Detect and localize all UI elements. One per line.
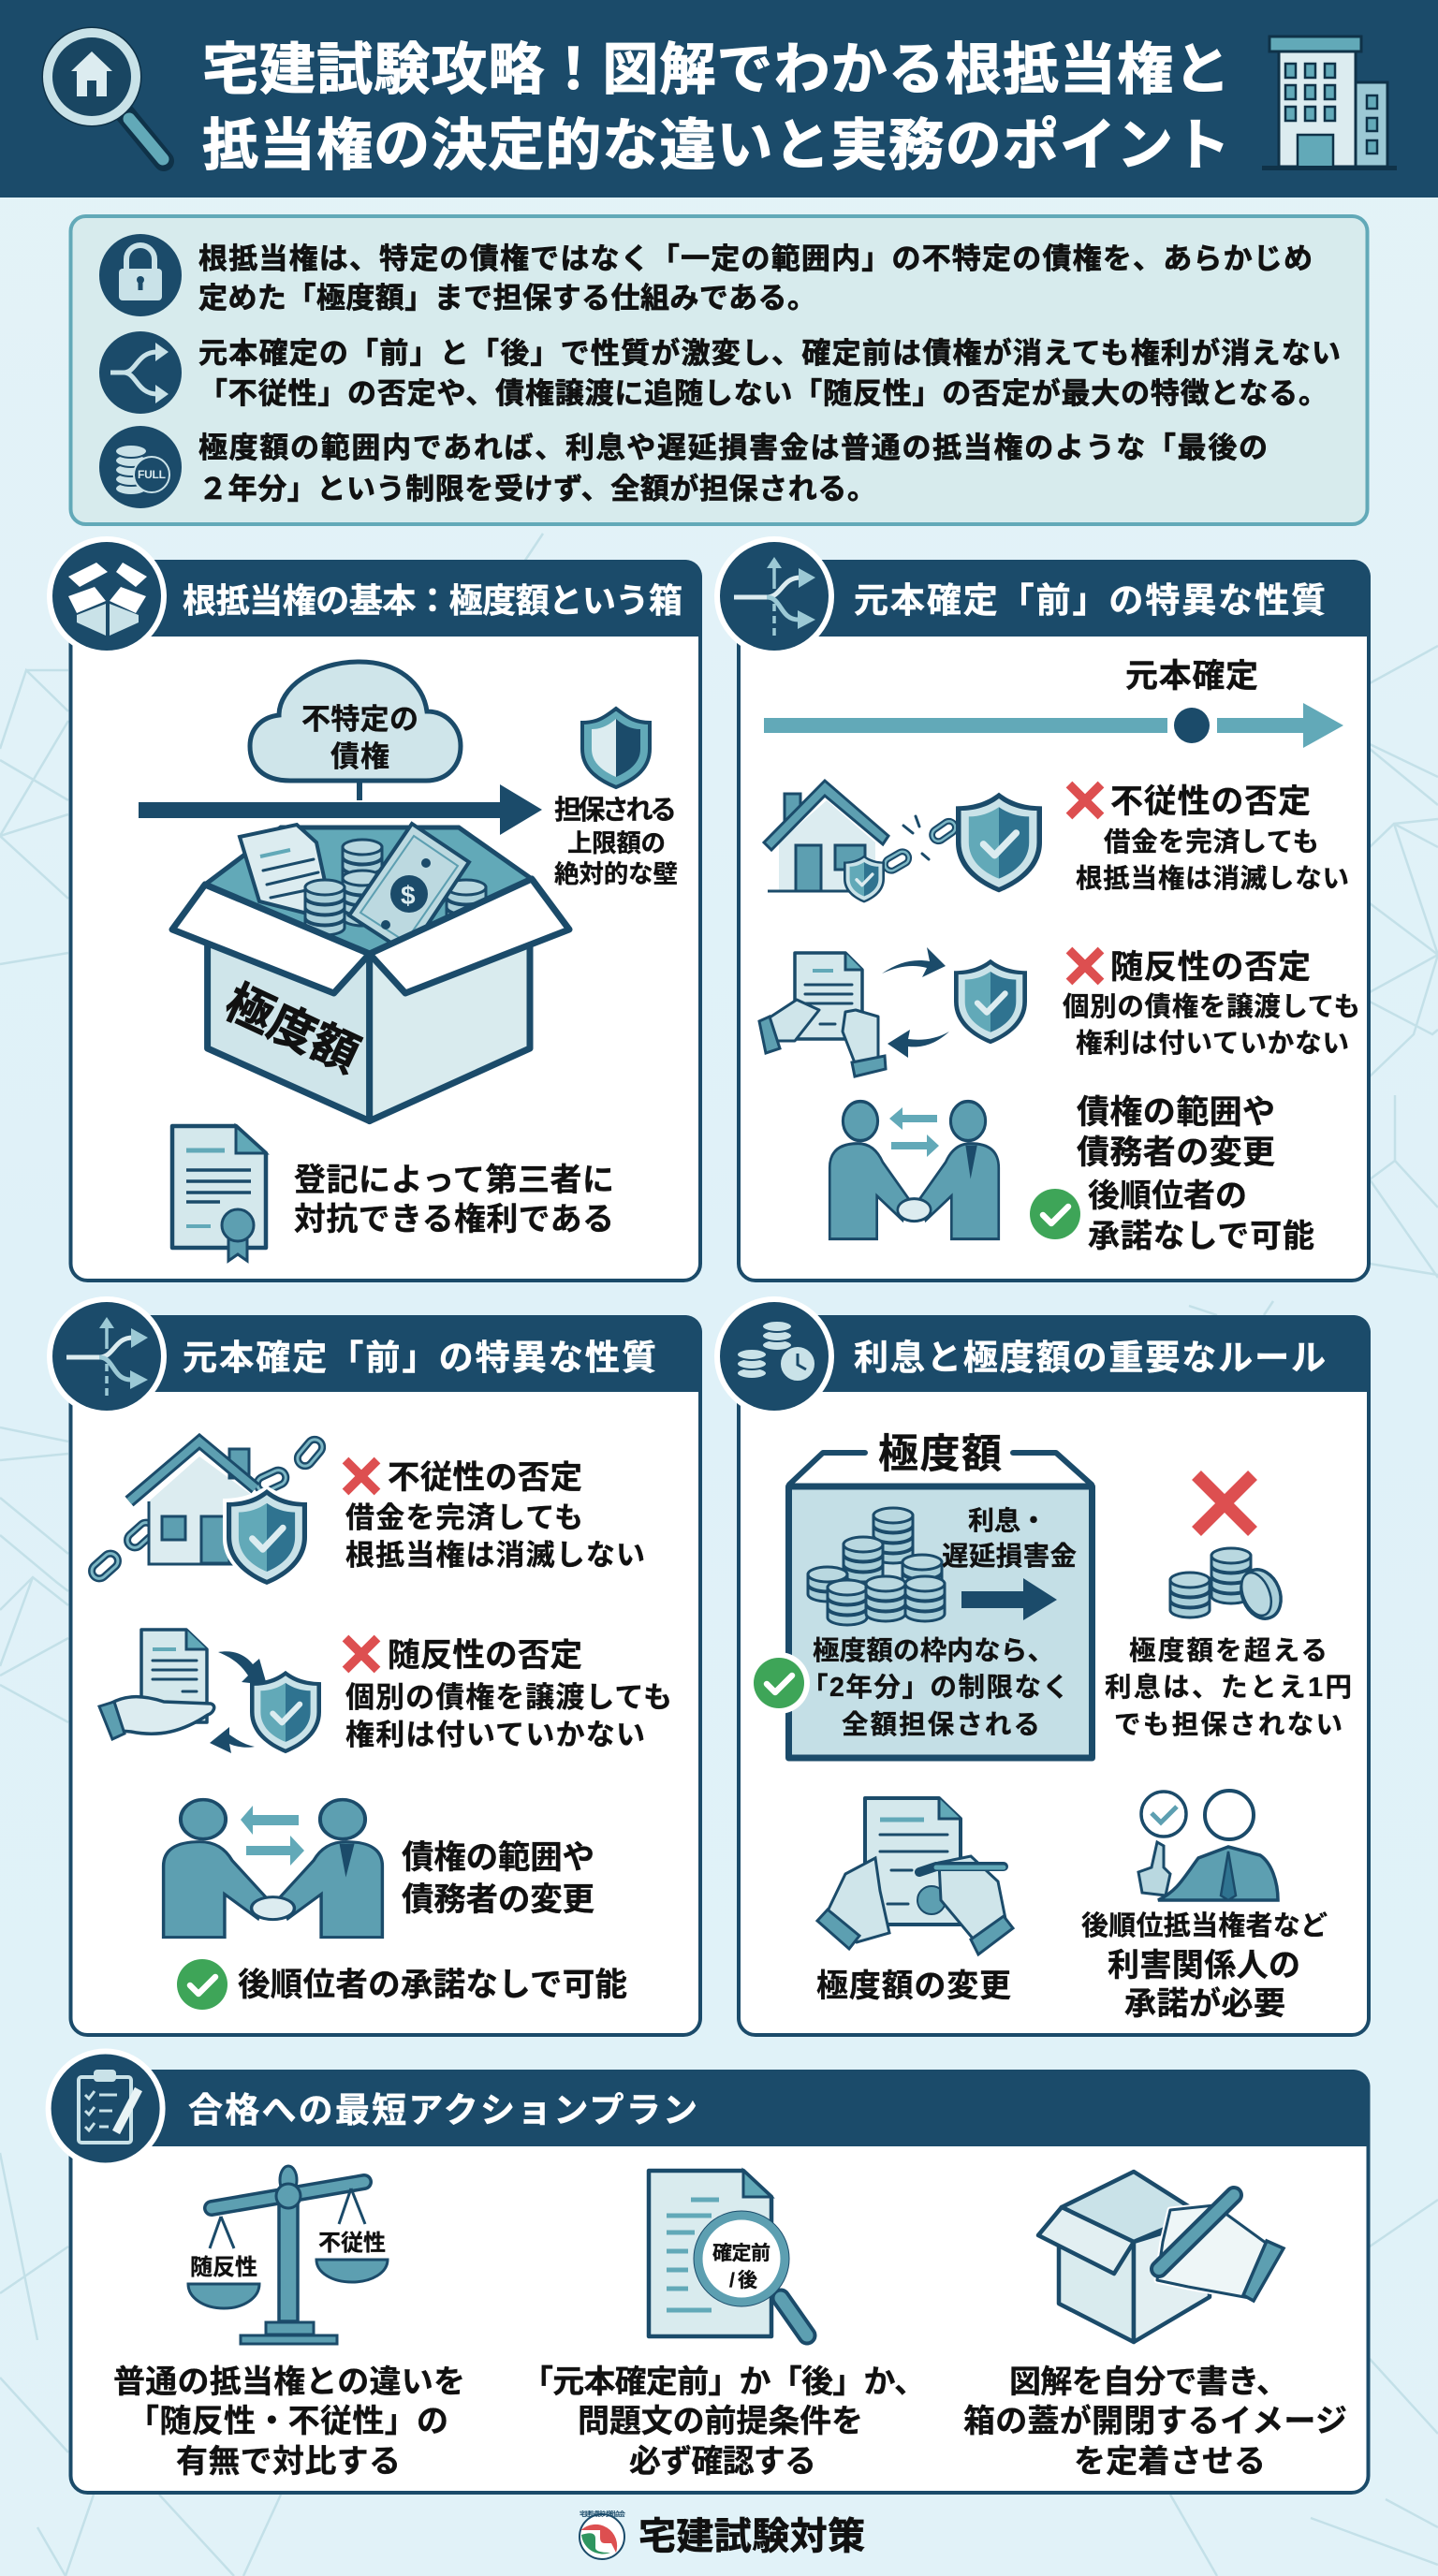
text: action 2: 問題文の前提条件を <box>578 2404 863 2439</box>
text: point 1 <box>198 242 1313 315</box>
heading: 元本確定「前」の特異な性質 <box>854 581 1326 620</box>
header band <box>0 0 1438 198</box>
text: changes: 承諾なしで可能 <box>1088 1219 1314 1254</box>
icon: document magnifier: /後 <box>729 2270 757 2291</box>
icon: cloud <box>250 662 461 800</box>
arrow: inflow <box>139 784 542 835</box>
text: not following <box>1063 949 1360 1059</box>
icon: handshake <box>829 1102 999 1239</box>
text: not accessory: 根抵当権は消滅しない <box>1076 864 1349 894</box>
text: point 2 <box>198 337 1341 410</box>
text: over limit <box>1105 1636 1352 1740</box>
text: consent required: 利害関係人の <box>1108 1948 1300 1983</box>
text: over limit: でも担保されない <box>1114 1710 1343 1740</box>
text: action 3 <box>963 2364 1347 2480</box>
text: not following: 随反性の否定 <box>1110 949 1311 986</box>
text: registration: 対抗できる権利である <box>294 1202 614 1237</box>
text: not accessory: 根抵当権は消滅しない <box>345 1539 645 1572</box>
text: changes: 債務者の変更 <box>1077 1134 1275 1171</box>
icon: handshake <box>164 1800 382 1938</box>
text: not following: 個別の債権を譲渡しても <box>345 1681 672 1714</box>
text: registration: 登記によって第三者に <box>294 1163 614 1198</box>
text: no consent needed <box>177 1959 627 2010</box>
text: point 3: 極度額の範囲内であれば、利息や遅延損害金は普通の抵当権のような「最後の <box>198 432 1268 464</box>
text: action 1: 普通の抵当権との違いを <box>113 2364 465 2400</box>
illustration: open box <box>172 824 569 1121</box>
text: upper limit <box>554 795 678 888</box>
diagram: limit box: 全額担保される <box>842 1710 1040 1740</box>
diagram: limit box: 「2年分」の制限なく <box>801 1673 1069 1703</box>
footer logo: 宅建試験対策協会 <box>580 2510 625 2518</box>
text: consent required: 承諾が必要 <box>1124 1985 1285 2022</box>
text: not following <box>345 1638 672 1751</box>
text: not accessory: 借金を完済しても <box>345 1501 583 1534</box>
diagram: limit box: 利息・ <box>968 1506 1047 1535</box>
text: changes: 債権の範囲や <box>1077 1094 1275 1131</box>
footer name: 宅建試験対策 <box>638 2516 865 2557</box>
icon: branch <box>99 331 182 414</box>
text: not accessory: 不従性の否定 <box>388 1460 582 1496</box>
text: upper limit: 絶対的な壁 <box>554 860 678 888</box>
icon: full coins <box>99 426 182 508</box>
text: not following: 個別の債権を譲渡しても <box>1063 992 1360 1022</box>
text: changes <box>402 1840 594 1918</box>
text: action 3: を定着させる <box>1074 2444 1266 2480</box>
text: not accessory: 借金を完済しても <box>1104 827 1319 857</box>
illustration: open box: 極度額 <box>217 975 367 1082</box>
title <box>202 38 1230 177</box>
panel: summary <box>71 216 1367 524</box>
icon: person with approval <box>1138 1791 1278 1900</box>
icon: open box badge <box>47 536 167 656</box>
text: point 2: 元本確定の「前」と「後」で性質が激変し、確定前は債権が消えても権利が消えない <box>198 337 1341 370</box>
text: point 1: 根抵当権は、特定の債権ではなく「一定の範囲内」の不特定の債権を、あらかじめ <box>198 242 1313 275</box>
panel: before crystallisation (timeline) <box>714 536 1371 1281</box>
text: point 2: 「不従性」の否定や、債権譲渡に追随しない「随反性」の否定が最大の特徴となる。 <box>198 377 1328 410</box>
text: consent required <box>1081 1910 1328 2022</box>
icon: red cross and coins <box>1170 1475 1288 1625</box>
text: registration <box>294 1163 614 1237</box>
heading: 元本確定「前」の特異な性質 <box>183 1339 656 1377</box>
icon: full coins: FULL <box>138 468 166 481</box>
text: changes: 債務者の変更 <box>402 1882 594 1918</box>
icon: branch badge <box>714 536 834 656</box>
icon: signing document <box>817 1798 1013 1954</box>
text: consent required: 後順位抵当権者など <box>1081 1910 1328 1941</box>
text: action 1: 「随反性・不従性」の <box>127 2404 448 2439</box>
icon: scales: 不従性 <box>318 2231 386 2256</box>
icon: document magnifier <box>649 2171 807 2336</box>
coin pile <box>808 1508 945 1625</box>
text: changes: 債権の範囲や <box>402 1840 594 1876</box>
icon: document magnifier: 確定前 <box>712 2243 770 2264</box>
text: point 1: 定めた「極度額」まで担保する仕組みである。 <box>198 282 816 315</box>
icon: scales: 随反性 <box>190 2255 257 2280</box>
title: 抵当権の決定的な違いと実務のポイント <box>202 114 1230 177</box>
text: not accessory: 不従性の否定 <box>1110 783 1311 820</box>
icon: certificate <box>172 1126 266 1261</box>
text: not accessory <box>345 1460 645 1572</box>
panel: interest rules <box>714 1296 1371 2035</box>
panel: action plan <box>46 2048 1371 2493</box>
heading: 根抵当権の基本：極度額という箱 <box>183 581 682 620</box>
heading: 合格への最短アクションプラン <box>188 2091 697 2130</box>
text: upper limit: 上限額の <box>567 829 666 857</box>
text: action 2: 「元本確定前」か「後」か、 <box>521 2364 926 2400</box>
panel: before crystallisation <box>47 1296 702 2035</box>
icon: scales <box>188 2166 388 2344</box>
text: no consent needed: 後順位者の承諾なしで可能 <box>238 1968 627 2003</box>
icon: half shield <box>582 709 650 787</box>
icon: hands doc shield <box>759 947 1027 1076</box>
icon: branch badge <box>47 1296 167 1416</box>
text: over limit: 利息は、たとえ1円 <box>1105 1673 1352 1703</box>
icon: office building <box>1262 37 1397 170</box>
icon: house chain shield <box>764 781 1042 903</box>
text: point 3: ２年分」という制限を受けず、全額が担保される。 <box>198 473 876 505</box>
text: action 1 <box>113 2364 465 2480</box>
text: action 3: 図解を自分で書き、 <box>1009 2364 1288 2400</box>
timeline <box>764 658 1343 748</box>
text: changes: 後順位者の <box>1088 1178 1247 1214</box>
title: 宅建試験攻略！図解でわかる根抵当権と <box>202 38 1230 101</box>
diagram: limit box: 極度額の枠内なら、 <box>813 1636 1054 1666</box>
text: over limit: 極度額を超える <box>1129 1636 1328 1666</box>
footer logo <box>580 2510 625 2559</box>
text: point 3 <box>198 432 1268 505</box>
text: action 2 <box>521 2364 926 2480</box>
icon: clipboard badge <box>46 2048 166 2168</box>
icon: hand doc shield <box>99 1630 321 1753</box>
text: not following: 随反性の否定 <box>388 1638 582 1674</box>
text: upper limit: 担保される <box>554 795 677 826</box>
icon: box and pen <box>1038 2172 1284 2342</box>
illustration: open box: $ <box>401 881 416 910</box>
icon: cloud: 債権 <box>330 740 389 773</box>
diagram: limit box: 遅延損害金 <box>942 1542 1077 1572</box>
icon: house chain shield <box>89 1437 325 1588</box>
text: change limit: 極度額の変更 <box>816 1969 1011 2004</box>
text: changes <box>1030 1094 1314 1254</box>
panel: basics <box>47 536 702 1281</box>
text: not accessory <box>1069 783 1349 894</box>
timeline: 元本確定 <box>1125 658 1258 695</box>
heading: 利息と極度額の重要なルール <box>854 1339 1326 1377</box>
text: action 1: 有無で対比する <box>176 2444 401 2480</box>
text: not following: 権利は付いていかない <box>1076 1029 1349 1059</box>
icon: coins clock badge <box>714 1296 834 1416</box>
text: action 2: 必ず確認する <box>629 2444 816 2480</box>
text: action 3: 箱の蓋が開閉するイメージ <box>963 2403 1347 2439</box>
diagram: limit box <box>748 1432 1092 1758</box>
icon: cloud: 不特定の <box>301 703 418 736</box>
icon: padlock <box>99 234 182 316</box>
text: not following: 権利は付いていかない <box>345 1719 645 1751</box>
icon: house magnifier <box>43 28 164 161</box>
diagram: limit box: 極度額 <box>878 1432 1002 1477</box>
